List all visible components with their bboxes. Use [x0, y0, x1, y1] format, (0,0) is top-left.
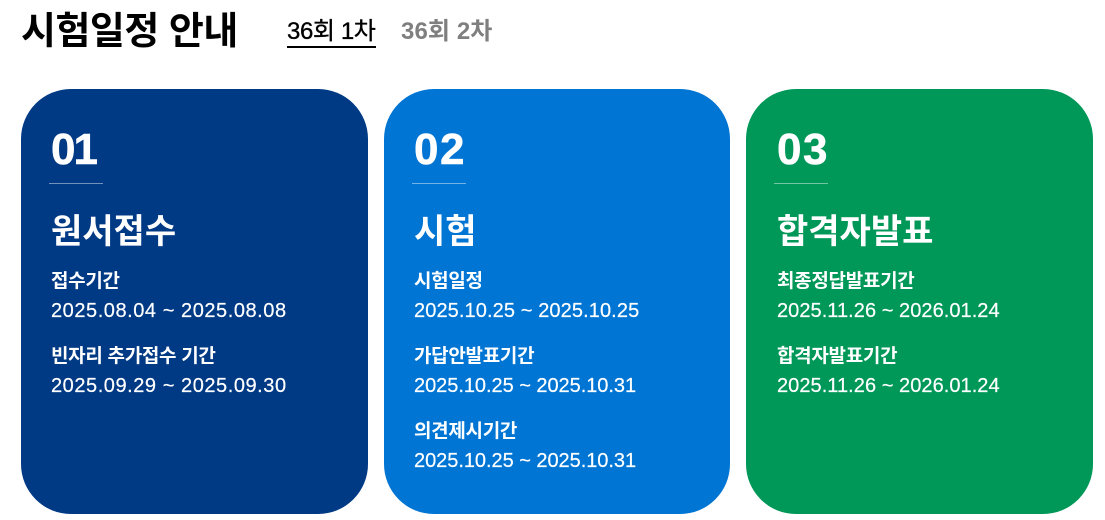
panel heading: 원서접수: [51, 213, 176, 251]
title: 시험일정 안내: [21, 11, 238, 53]
date range: 2025.11.26 ~ 2026.01.24: [777, 375, 1000, 397]
panel: 02 시험: [384, 89, 730, 514]
panel heading: 합격자발표: [777, 213, 933, 251]
label: 최종정답발표기간: 최종정답발표기간: [777, 271, 914, 292]
date range: 2025.10.25 ~ 2025.10.31: [414, 375, 636, 397]
label: 빈자리 추가접수 기간: 빈자리 추가접수 기간: [51, 346, 216, 367]
label: 의견제시기간: 의견제시기간: [414, 421, 517, 442]
date range: 2025.10.25 ~ 2025.10.31: [414, 450, 636, 472]
step number 02: 02: [414, 125, 466, 174]
tab: 36회 2차: 36회 2차: [401, 18, 492, 45]
step number 03: 03: [777, 125, 829, 174]
date range: 2025.08.04 ~ 2025.08.08: [51, 300, 287, 322]
date range: 2025.10.25 ~ 2025.10.25: [414, 300, 639, 322]
label: 접수기간: 접수기간: [51, 271, 120, 292]
panel: 01 원서접수: [21, 89, 368, 514]
label: 가답안발표기간: 가답안발표기간: [414, 346, 534, 367]
panel: 03 합격자발표: [746, 89, 1093, 514]
panel heading: 시험: [414, 213, 477, 251]
step number 01: 01: [51, 125, 96, 174]
tab: 36회 1차 (active): 36회 1차: [287, 18, 375, 45]
date range: 2025.09.29 ~ 2025.09.30: [51, 375, 287, 397]
label: 시험일정: 시험일정: [414, 271, 483, 292]
label: 합격자발표기간: 합격자발표기간: [777, 346, 897, 367]
date range: 2025.11.26 ~ 2026.01.24: [777, 300, 1000, 322]
